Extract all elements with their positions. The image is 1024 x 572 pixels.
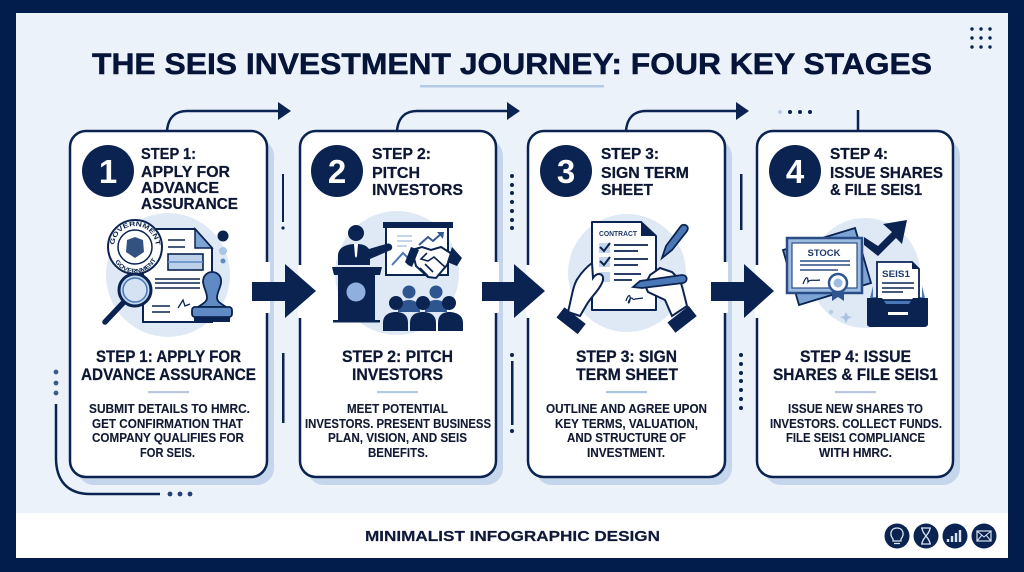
step description 3: KEY TERMS, VALUATION, (555, 417, 698, 431)
step number badge 4 (769, 145, 821, 197)
step description 3: INVESTMENT. (587, 446, 665, 460)
arrow: step 3 to step 4 (711, 264, 774, 318)
step description 3: OUTLINE AND AGREE UPON (546, 402, 707, 416)
step header 3 (601, 146, 689, 199)
step header 2: PITCH (372, 165, 420, 182)
panel: step 1 (68, 130, 274, 485)
step heading 1 (81, 348, 256, 393)
arrow: step 2 to step 3 (482, 264, 545, 318)
icon: stock certificate and SEIS1 filing (783, 218, 928, 328)
icon: dot grid (970, 27, 992, 49)
step header 4: & FILE SEIS1 (830, 182, 922, 199)
step heading 2: STEP 2: PITCH (342, 348, 453, 366)
icon: light bulb (884, 524, 910, 548)
step header 2: STEP 2: (372, 146, 431, 163)
step description 1: GET CONFIRMATION THAT (92, 417, 243, 431)
icon: investor pitch with presenter, chart, handshake and audience (332, 211, 463, 335)
step description 3 (546, 402, 707, 460)
step number badge 2 (311, 145, 363, 197)
connector arrow: card 1 top (167, 102, 291, 131)
step number badge 3: 3 (557, 153, 575, 190)
decorative bracket: bottom left (54, 370, 192, 496)
step header 1: APPLY FOR (141, 164, 230, 181)
icon: stock certificate and SEIS1 filing: STOCK (808, 248, 841, 259)
step description 4: ISSUE NEW SHARES TO (788, 402, 923, 416)
arrow: step 1 to step 2 (252, 264, 316, 318)
step heading 3: STEP 3: SIGN (576, 348, 677, 366)
step description 4: FILE SEIS1 COMPLIANCE (786, 431, 925, 445)
panel: step 4 (755, 131, 960, 485)
step description 4 (770, 402, 942, 460)
step header 1 (141, 146, 238, 213)
step header 1: ASSURANCE (141, 196, 238, 213)
step heading 4: STEP 4: ISSUE (800, 348, 911, 366)
step heading 1: ADVANCE ASSURANCE (81, 366, 256, 384)
connector arrow: card 2 top (397, 102, 520, 131)
icon: signing the contract: CONTRACT (599, 231, 638, 238)
step header 1: STEP 1: (141, 146, 196, 163)
step heading 2 (342, 348, 453, 393)
step heading 2: INVESTORS (352, 366, 443, 384)
step description 1 (89, 402, 250, 460)
step heading 1: STEP 1: APPLY FOR (96, 348, 241, 366)
step header 3: STEP 3: (601, 146, 659, 163)
step description 1: COMPANY QUALIFIES FOR (92, 431, 244, 445)
step heading 3: TERM SHEET (576, 366, 678, 384)
icon: hourglass (914, 524, 938, 548)
step description 4: INVESTORS. COLLECT FUNDS. (770, 417, 942, 431)
panel: step 3 (526, 131, 732, 485)
step header 4: ISSUE SHARES (830, 165, 943, 182)
step description 3: AND STRUCTURE OF (567, 431, 686, 445)
step description 2: MEET POTENTIAL (347, 402, 448, 416)
step header 4: STEP 4: (830, 146, 888, 163)
icon: signing the contract (556, 214, 697, 334)
step number badge 4: 4 (786, 153, 805, 190)
icon: envelope (972, 524, 996, 548)
step header 3: SIGN TERM (601, 165, 689, 182)
icon: application documents with seal, magnifier and stamp (102, 213, 233, 337)
step number badge 3 (540, 145, 592, 197)
step number badge 1: 1 (99, 153, 117, 190)
step header 2 (372, 146, 463, 199)
footer band (16, 513, 1008, 558)
step description 2 (305, 402, 491, 460)
step header 2: INVESTORS (372, 182, 463, 199)
gutter marks (281, 174, 743, 433)
footer label: MINIMALIST INFOGRAPHIC DESIGN (365, 528, 660, 545)
icon: application documents with seal, magnifier and stamp: GOVERNMENT (110, 222, 160, 245)
connector arrow: card 3 top (626, 102, 749, 131)
step heading 3 (576, 348, 678, 393)
step description 4: WITH HMRC. (819, 446, 892, 460)
title: THE SEIS INVESTMENT JOURNEY: FOUR KEY STAGES (92, 48, 932, 81)
step number badge 2: 2 (328, 153, 346, 190)
step description 2: INVESTORS. PRESENT BUSINESS (305, 417, 491, 431)
icon: signal bars (942, 524, 968, 548)
step description 2: PLAN, VISION, AND SEIS (328, 431, 467, 445)
step description 2: BENEFITS. (368, 446, 428, 460)
icon: application documents with seal, magnifier and stamp: GOVERNMENT (116, 258, 156, 273)
step header 3: SHEET (601, 182, 654, 199)
icon: stock certificate and SEIS1 filing: SEIS1 (882, 269, 911, 280)
step heading 4: SHARES & FILE SEIS1 (773, 366, 938, 384)
connector: card 4 top (778, 110, 858, 131)
step heading 4 (773, 348, 938, 393)
step header 1: ADVANCE (141, 180, 219, 197)
step number badge 1 (82, 145, 134, 197)
panel: step 2 (298, 131, 503, 485)
step description 1: SUBMIT DETAILS TO HMRC. (89, 402, 250, 416)
step description 1: FOR SEIS. (140, 446, 195, 460)
step header 4 (830, 146, 943, 199)
